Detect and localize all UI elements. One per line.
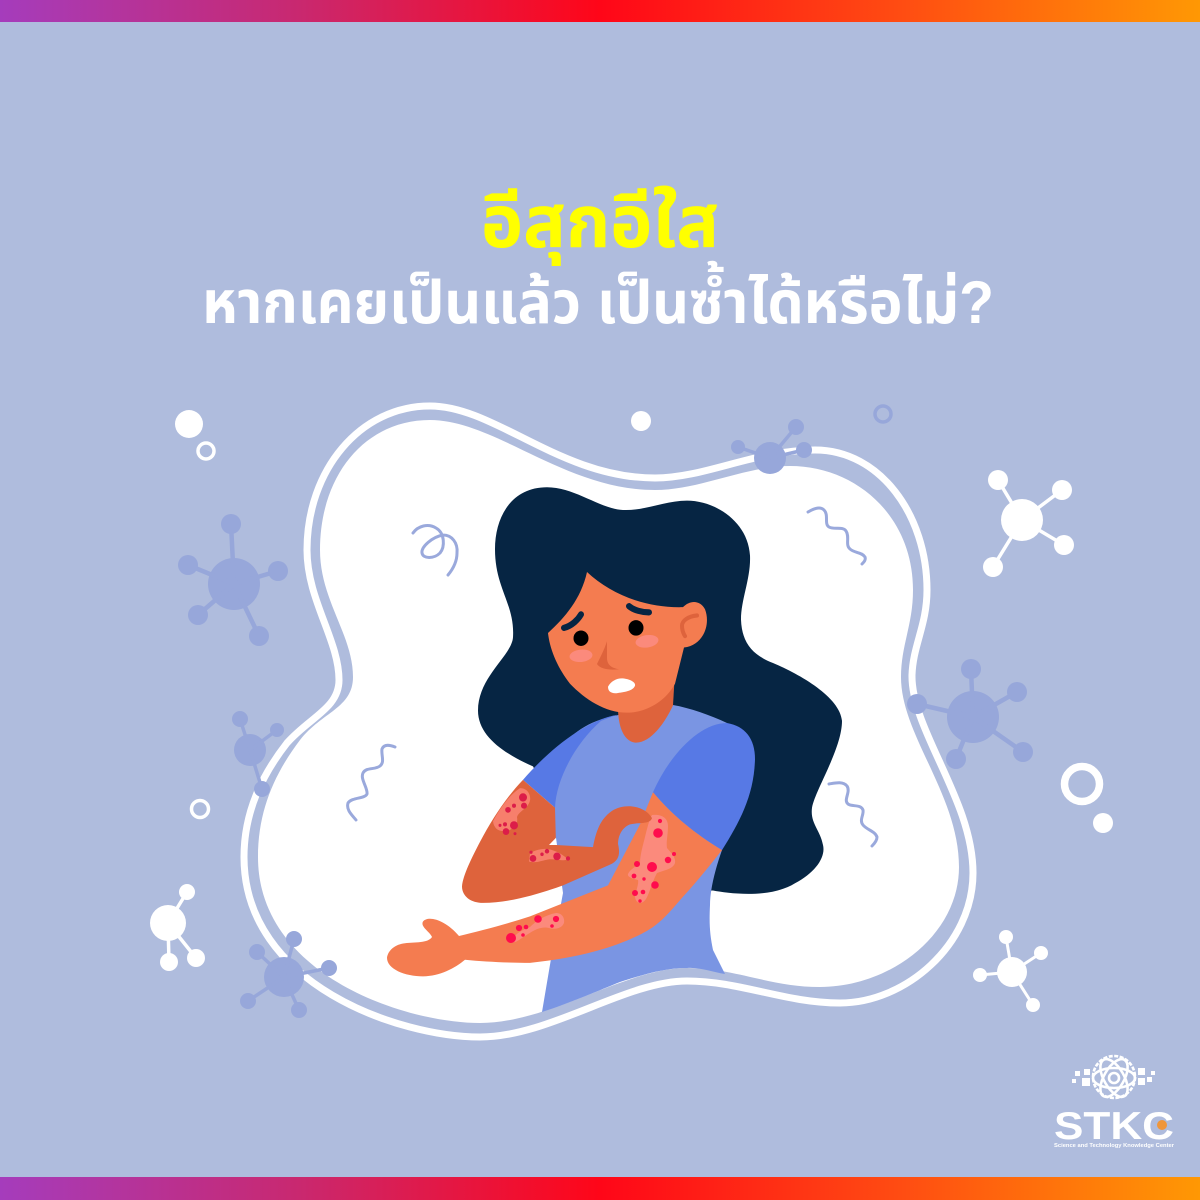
squiggles bbox=[348, 508, 877, 846]
arm gap bbox=[549, 838, 557, 845]
mouth bbox=[608, 678, 635, 693]
face bbox=[548, 572, 707, 713]
molecule: left on frame bbox=[232, 711, 284, 797]
logo wordmark: STKC bbox=[1054, 1105, 1174, 1148]
rash patch bbox=[529, 849, 568, 862]
rash patch bbox=[628, 815, 675, 903]
neck bbox=[618, 671, 675, 743]
eye right bbox=[628, 620, 644, 636]
logo tagline: Science and Technology Knowledge Center bbox=[1054, 1143, 1175, 1149]
rash spots bbox=[506, 915, 559, 943]
face details bbox=[564, 606, 697, 693]
rash patch bbox=[513, 913, 564, 942]
logo orange dot bbox=[1157, 1120, 1167, 1130]
molecule: white lower left bbox=[150, 884, 205, 971]
shirt right sleeve bbox=[653, 723, 755, 850]
person bbox=[387, 487, 842, 1012]
eye left bbox=[574, 630, 588, 646]
squiggle right bbox=[829, 783, 877, 846]
molecule: upper left bbox=[178, 514, 288, 646]
nose bbox=[597, 641, 619, 670]
shirt left sleeve bbox=[523, 715, 617, 808]
title bbox=[202, 182, 994, 336]
right arm bbox=[387, 792, 722, 976]
molecule: lower left on frame bbox=[240, 931, 337, 1018]
dots and rings bbox=[175, 406, 1113, 833]
rash spots bbox=[529, 849, 570, 862]
logo: STKC bbox=[1054, 1055, 1175, 1149]
rash: forearm bbox=[529, 849, 570, 862]
rash: right upper arm bbox=[628, 815, 676, 903]
eyebrow left bbox=[564, 614, 581, 628]
rash spots bbox=[498, 793, 527, 835]
frame: outer white ring bbox=[244, 406, 973, 1037]
heading: yellow: อีสุกอีใส bbox=[481, 182, 719, 266]
shirt body bbox=[542, 705, 740, 1012]
logo atom icon bbox=[1093, 1055, 1135, 1101]
hair bbox=[478, 487, 842, 894]
squiggle left bbox=[348, 745, 395, 820]
rash patch bbox=[493, 788, 530, 831]
blush left bbox=[569, 649, 593, 663]
heading: white subtitle: หากเคยเป็นแล้ว เป็นซ้ำได้หรือไม่? bbox=[202, 260, 994, 336]
ear inner bbox=[682, 615, 697, 636]
bottom gradient bar bbox=[0, 1177, 1200, 1200]
frame: inner white panel bbox=[258, 420, 959, 1023]
logo pixel squares bbox=[1072, 1068, 1155, 1086]
rash: lower arm bbox=[506, 913, 564, 943]
molecule: right on frame bbox=[907, 659, 1033, 769]
left arm bbox=[462, 780, 652, 903]
molecule: top on frame bbox=[731, 419, 812, 474]
rash: upper left arm bbox=[493, 788, 530, 835]
eyebrow right bbox=[629, 606, 649, 612]
blush right bbox=[635, 634, 659, 649]
rash spots bbox=[632, 819, 676, 903]
top gradient bar bbox=[0, 0, 1200, 22]
squiggle top right bbox=[808, 508, 865, 564]
molecule: white upper right bbox=[983, 470, 1074, 577]
molecule: white lower right bbox=[973, 930, 1048, 1012]
swirl bbox=[413, 526, 457, 575]
